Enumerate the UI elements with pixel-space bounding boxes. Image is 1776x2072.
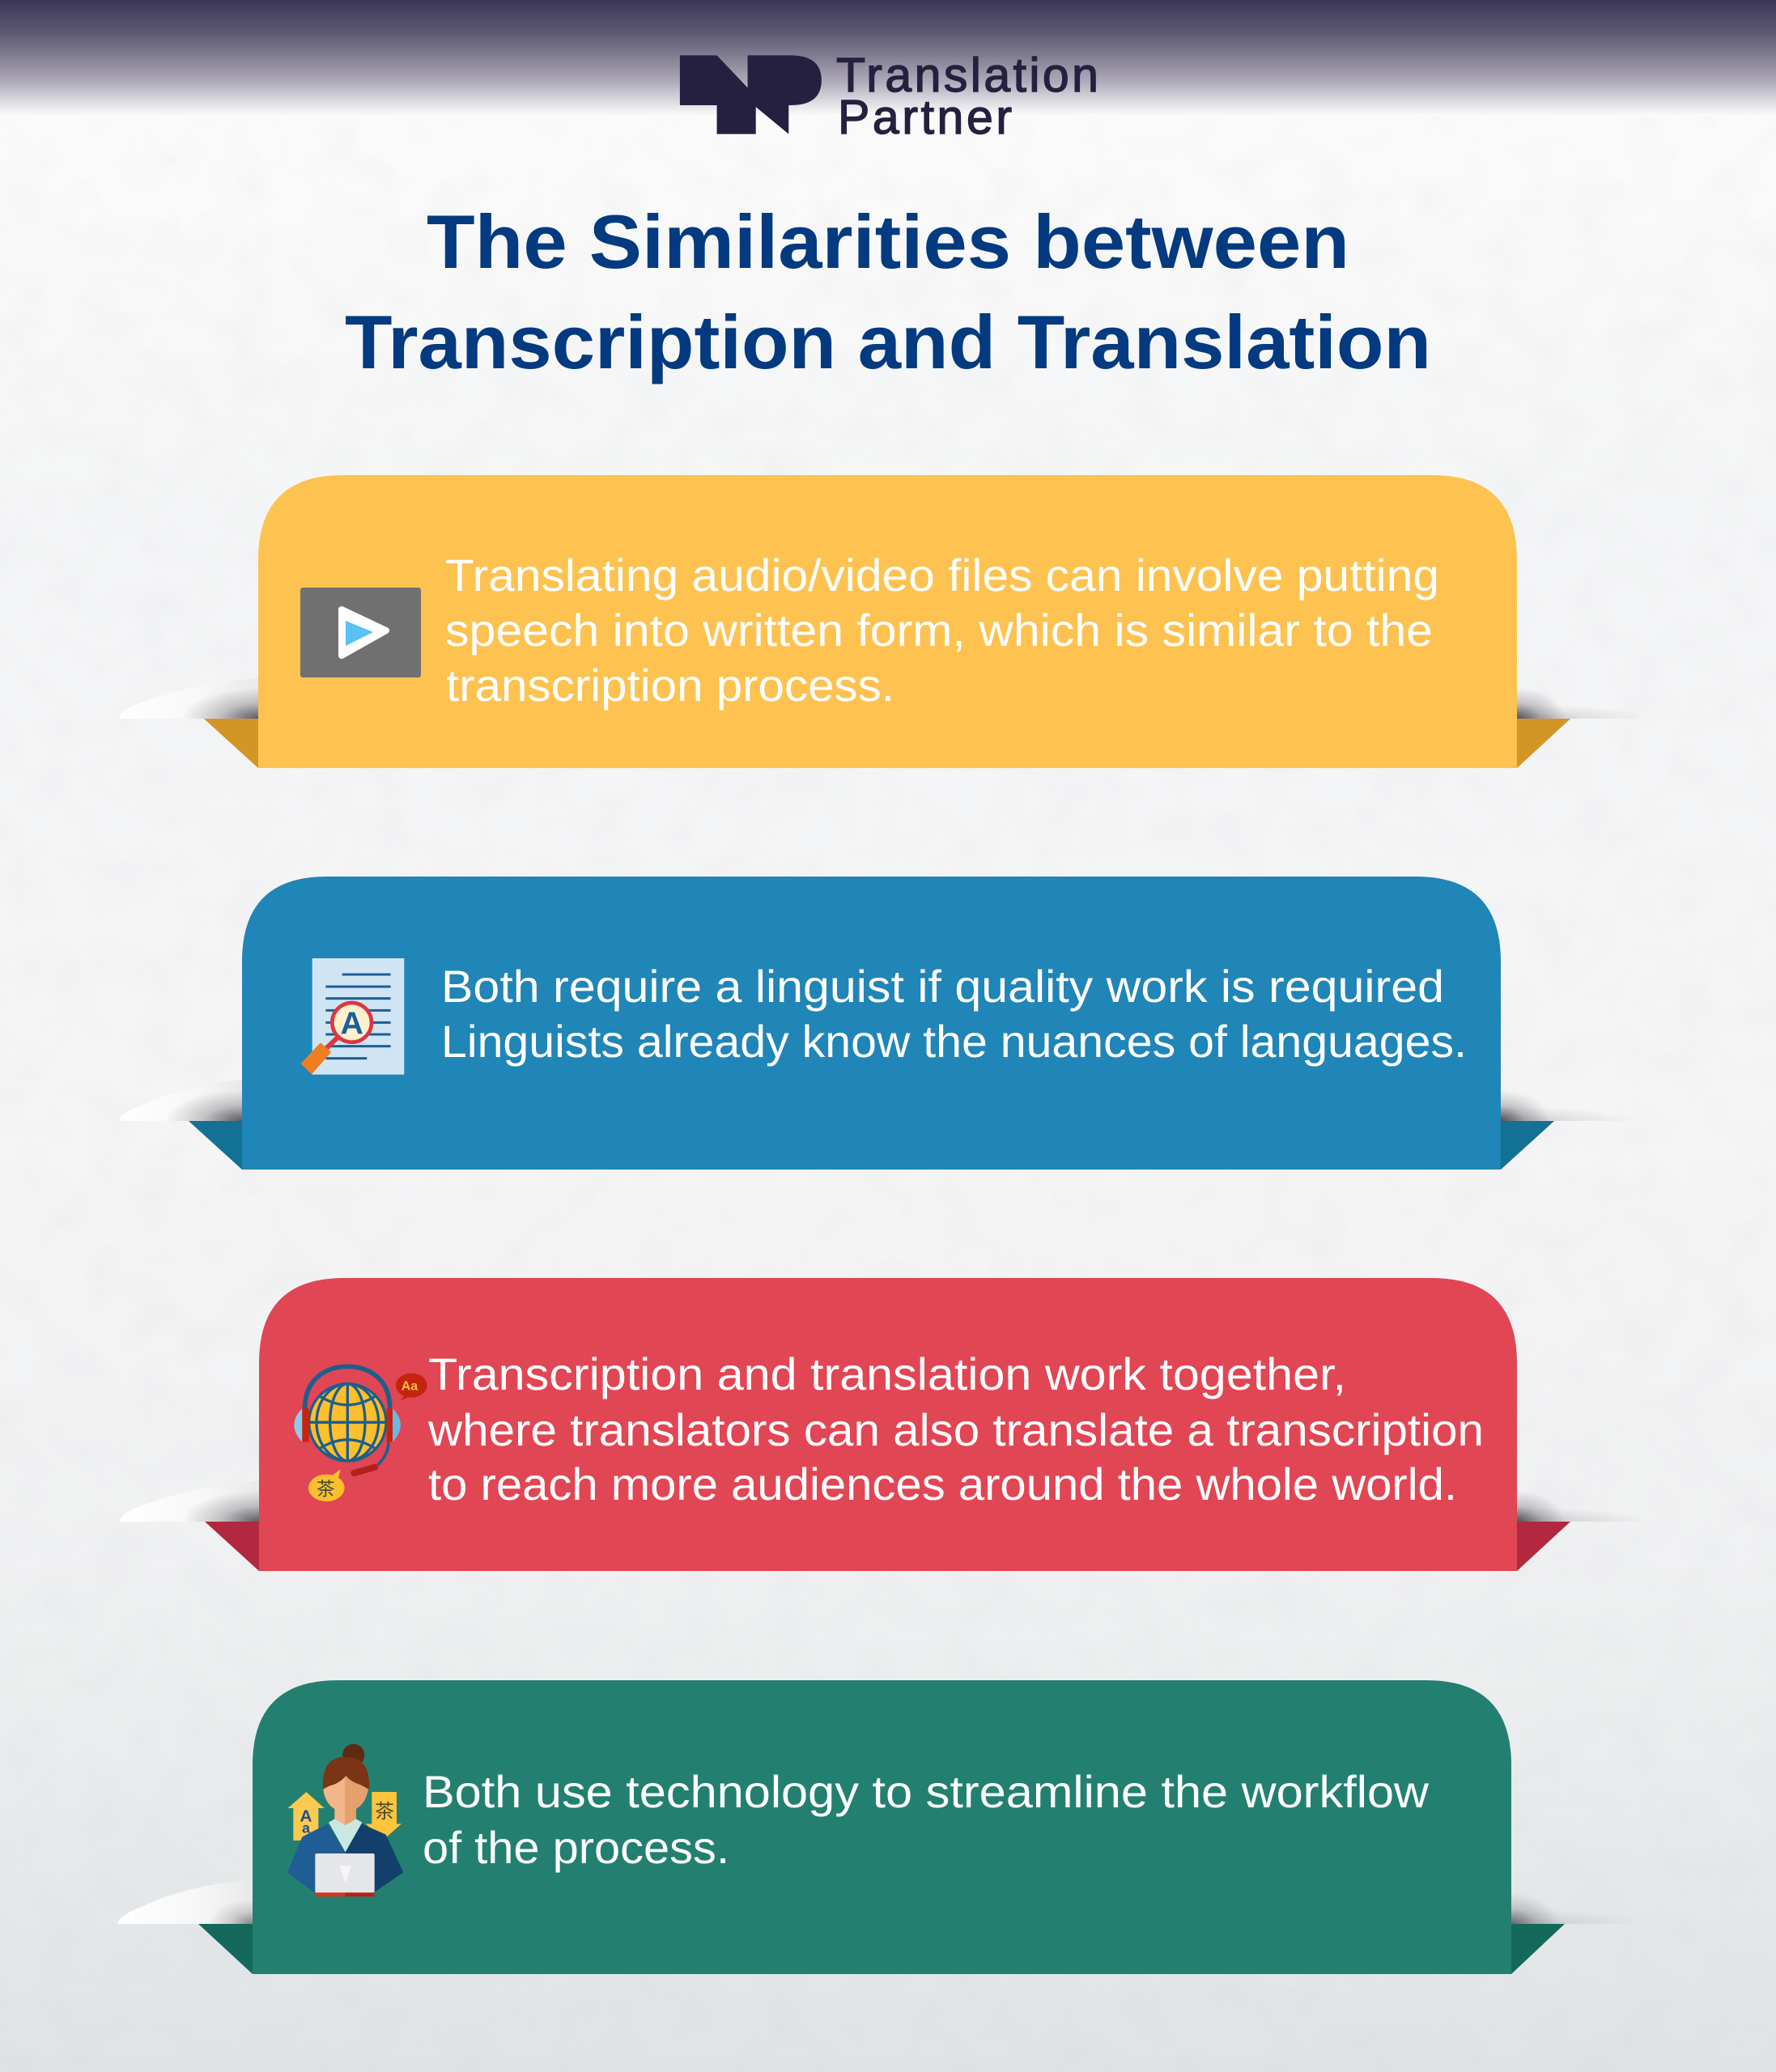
panel text: Linguists already know the nuances of languages. <box>441 1016 1467 1067</box>
page curl shadow right <box>1511 1896 1606 1924</box>
ribbon fold left <box>189 1121 242 1170</box>
panel text: speech into written form, which is similar to the <box>445 605 1433 656</box>
panel text: to reach more audiences around the whole world. <box>428 1458 1457 1509</box>
logo wordmark: Translation <box>836 49 1098 102</box>
page curl shadow left <box>120 1481 259 1522</box>
panel body <box>258 475 1517 768</box>
icon: translator at laptop: 茶 <box>375 1801 394 1823</box>
panel text: where translators can also translate a transcription <box>427 1404 1484 1455</box>
panel: audio/video files <box>119 475 1651 768</box>
icon: document with magnifier: A <box>340 1005 363 1041</box>
icon: globe with headset <box>294 1366 427 1501</box>
icon: globe with headset: Aa <box>402 1379 418 1393</box>
ribbon fold left <box>204 719 258 768</box>
ribbon fold left <box>205 1522 259 1571</box>
ribbon fold right <box>1511 1924 1565 1974</box>
panel text <box>427 1348 1484 1509</box>
page curl shadow left <box>119 678 258 719</box>
panel: linguist <box>119 877 1634 1170</box>
page curl shadow right <box>1517 1493 1622 1522</box>
panel text: transcription process. <box>446 660 894 711</box>
title: Transcription and Translation <box>345 299 1431 384</box>
icon: document with magnifier <box>302 958 404 1075</box>
title <box>345 199 1431 384</box>
icon: translator at laptop: A <box>300 1807 312 1826</box>
icon: globe with headset: 茶 <box>317 1479 335 1500</box>
page curl shadow left <box>117 1881 253 1924</box>
page curl shadow right <box>1517 690 1622 719</box>
icon: translator at laptop: a <box>302 1819 311 1836</box>
panel text <box>423 1766 1430 1873</box>
panel text: Translating audio/video files can involve putting <box>445 550 1439 601</box>
logo mark: NP <box>680 55 822 134</box>
page curl shadow right <box>1501 1093 1608 1121</box>
ribbon fold right <box>1501 1121 1554 1170</box>
panel text <box>445 550 1439 711</box>
panel body <box>259 1278 1517 1571</box>
icon: video play <box>300 588 421 677</box>
ribbon fold right <box>1517 719 1570 768</box>
panel body <box>242 877 1501 1170</box>
panel: technology <box>117 1680 1645 1974</box>
ribbon fold right <box>1517 1522 1570 1571</box>
logo wordmark <box>836 49 1098 144</box>
icon: translator at laptop <box>287 1744 403 1896</box>
panel text <box>441 961 1467 1067</box>
ribbon fold left <box>198 1924 253 1974</box>
title: The Similarities between <box>427 199 1349 284</box>
logo: Translation Partner <box>680 49 1098 144</box>
page curl shadow left <box>119 1080 242 1121</box>
panel body <box>253 1680 1511 1974</box>
panel: working together <box>120 1278 1651 1571</box>
panel text: Both use technology to streamline the workflow <box>423 1766 1430 1817</box>
logo wordmark: Partner <box>838 91 1012 144</box>
panel text: Both require a linguist if quality work is required <box>441 961 1444 1012</box>
panel text: Transcription and translation work together, <box>428 1348 1346 1399</box>
panel text: of the process. <box>423 1822 729 1873</box>
